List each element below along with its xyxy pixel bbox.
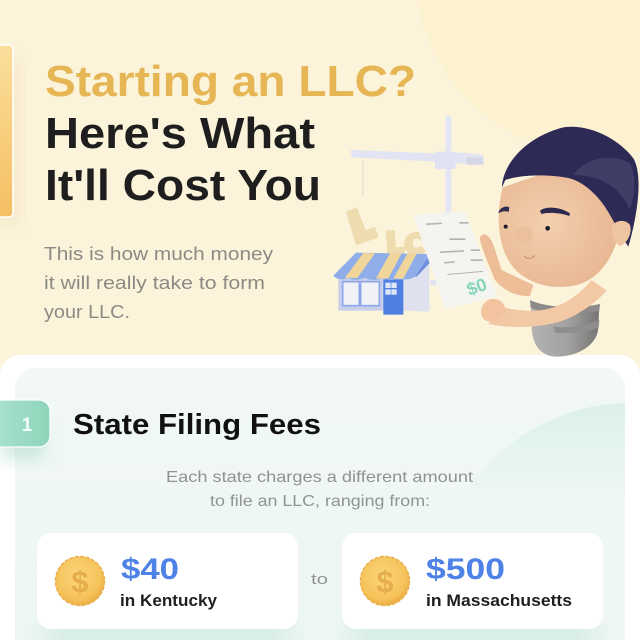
card: Massachusetts: in Massachusetts bbox=[426, 592, 572, 610]
icon: bill with zero dollars: $0 bbox=[464, 274, 490, 300]
panel: state filing fees bbox=[0, 368, 625, 640]
intro text: it will really take to form bbox=[44, 272, 265, 293]
front arm bbox=[488, 280, 607, 327]
icon: person bbox=[480, 127, 639, 357]
intro text: your LLC. bbox=[44, 301, 130, 322]
body bbox=[531, 302, 599, 357]
lower ring bbox=[553, 320, 599, 333]
icon: coin: $ bbox=[376, 564, 394, 599]
card: Massachusetts bbox=[335, 533, 610, 640]
section description: to file an LLC, ranging from: bbox=[210, 493, 430, 510]
illustration: crane, shop and person with bill bbox=[333, 116, 639, 357]
title bbox=[45, 57, 416, 210]
icon: coin bbox=[360, 556, 410, 606]
icon: crane bbox=[351, 116, 483, 285]
collar bbox=[530, 300, 600, 314]
icon: LLC letters bbox=[346, 207, 426, 257]
head bbox=[499, 170, 618, 287]
card: Kentucky: in Kentucky bbox=[120, 592, 218, 610]
gold side tab bbox=[0, 45, 20, 225]
mouth bbox=[524, 255, 535, 258]
decorative mint arc bbox=[435, 403, 625, 640]
connector word: to bbox=[311, 571, 328, 588]
back arm bbox=[480, 234, 533, 296]
card: Massachusetts: $500 bbox=[426, 553, 505, 586]
white content sheet bbox=[0, 355, 640, 640]
intro text: This is how much money bbox=[44, 243, 274, 264]
icon: coin: $ bbox=[71, 564, 89, 599]
eyebrows bbox=[499, 207, 509, 213]
ear bbox=[612, 221, 631, 246]
hair bbox=[502, 127, 639, 247]
card: Kentucky bbox=[30, 533, 305, 640]
nose bbox=[514, 226, 533, 244]
section heading: State Filing Fees bbox=[73, 409, 321, 441]
section description: Each state charges a different amount bbox=[166, 469, 474, 486]
number badge: 1 bbox=[22, 415, 33, 436]
hand bbox=[481, 299, 505, 321]
icon: shop bbox=[333, 253, 430, 315]
intro text bbox=[44, 243, 274, 322]
title: Starting an LLC? bbox=[45, 57, 416, 106]
title: Here's What bbox=[45, 109, 315, 158]
eyes bbox=[504, 225, 508, 229]
number badge bbox=[0, 400, 50, 459]
section description bbox=[166, 469, 474, 510]
icon: bill with zero dollars bbox=[413, 212, 497, 309]
icon: coin bbox=[56, 556, 104, 606]
title: It'll Cost You bbox=[45, 161, 321, 210]
card: Kentucky: $40 bbox=[121, 553, 179, 586]
decorative background circle bbox=[417, 0, 640, 155]
